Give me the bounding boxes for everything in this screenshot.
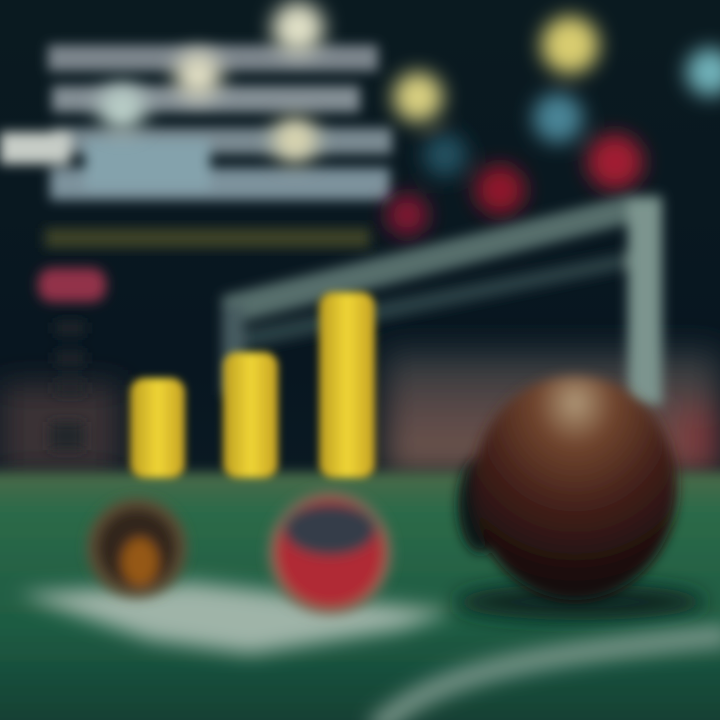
bar chart — [130, 292, 375, 478]
bar: tall — [319, 292, 375, 478]
blurred subtitle band — [45, 228, 370, 248]
pitch line arc — [375, 635, 720, 720]
goal frame — [222, 195, 662, 405]
football — [458, 376, 677, 600]
badge: right — [268, 491, 392, 615]
bar: small — [130, 378, 185, 478]
white sheet on pitch — [18, 582, 455, 654]
bar: medium — [223, 352, 278, 478]
legend lights — [98, 2, 720, 236]
pink label — [38, 268, 106, 302]
stadium crowd — [0, 350, 720, 475]
ball shadow — [455, 584, 705, 620]
badge: left — [87, 498, 187, 598]
blurred headline text block — [0, 45, 392, 200]
pitch — [0, 472, 720, 720]
faint vertical axis marks — [50, 322, 85, 450]
